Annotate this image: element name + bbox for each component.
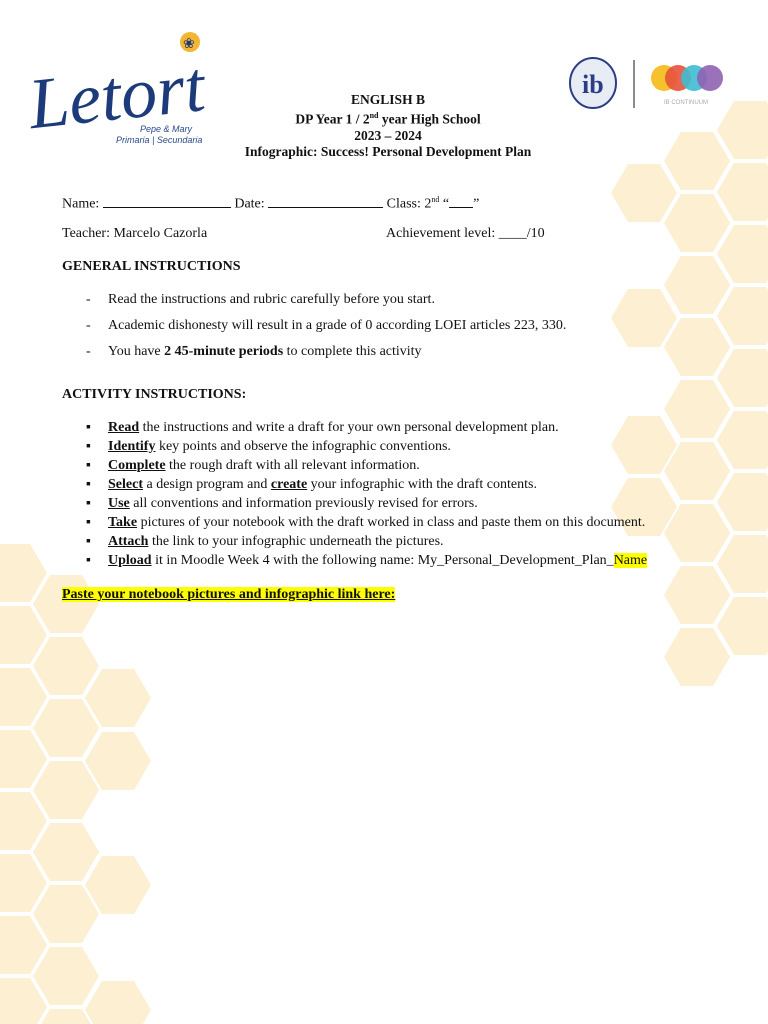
activity instructions list: Select a design program and create your infographic with the draft contents. [108, 477, 537, 492]
logo: Letort: ❀ [183, 36, 195, 52]
activity instructions list: Complete the rough draft with all relevant information. [108, 458, 420, 473]
logo: Letort: Primaria | Secundaria [116, 135, 202, 145]
activity instructions list: ▪ [86, 439, 91, 454]
general instructions list [86, 292, 566, 359]
activity instructions list: Use all conventions and information previously revised for errors. [108, 496, 478, 511]
heading: activity instructions: ACTIVITY INSTRUCTIONS: [62, 387, 246, 402]
activity instructions list: ▪ [86, 534, 91, 549]
activity instructions list: Upload it in Moodle Week 4 with the following name: My_Personal_Development_Plan_Name [108, 553, 647, 568]
text: You have 2 45-minute periods to complete this activity [108, 344, 422, 359]
activity instructions list: Take pictures of your notebook with the draft worked in class and paste them on this document. [108, 515, 645, 530]
student info fields: Name: Date: Class: 2nd “ ” [62, 195, 479, 212]
logo: IB: IB CONTINUUM [664, 100, 708, 106]
teacher and achievement: Achievement level: ____/10 [386, 226, 545, 241]
title block: Infographic: Success! Personal Development Plan [245, 144, 531, 158]
logo: IB: ib [582, 70, 604, 99]
logo: Letort: Pepe & Mary [140, 124, 193, 134]
activity instructions list: ▪ [86, 458, 91, 473]
highlighted paste prompt: Paste your notebook pictures and infographic link here: [62, 587, 395, 602]
logo: Letort: Letort [30, 46, 210, 144]
title block: ENGLISH B [351, 92, 425, 107]
activity instructions list: ▪ [86, 515, 91, 530]
activity instructions list: Read the instructions and write a draft for your own personal development plan. [108, 420, 559, 435]
activity instructions list: ▪ [86, 420, 91, 435]
text: Academic dishonesty will result in a grade of 0 according LOEI articles 223, 330. [108, 318, 566, 333]
teacher and achievement [62, 226, 545, 241]
title block: DP Year 1 / 2nd year High School [295, 111, 481, 126]
text: - [86, 318, 91, 333]
text: - [86, 292, 91, 307]
activity instructions list: ▪ [86, 477, 91, 492]
text: - [86, 344, 91, 359]
heading: general instructions: GENERAL INSTRUCTIONS [62, 259, 241, 274]
title block [245, 92, 532, 159]
title block: 2023 – 2024 [354, 128, 422, 142]
text: Read the instructions and rubric carefully before you start. [108, 292, 435, 307]
activity instructions list: ▪ [86, 496, 91, 511]
activity instructions list: Attach the link to your infographic underneath the pictures. [108, 534, 444, 549]
activity instructions list: ▪ [86, 553, 91, 568]
teacher and achievement: Teacher: Marcelo Cazorla [62, 226, 207, 241]
activity instructions list: Identify key points and observe the infographic conventions. [108, 439, 451, 454]
activity instructions list [86, 420, 647, 568]
logo: IB [569, 57, 723, 109]
